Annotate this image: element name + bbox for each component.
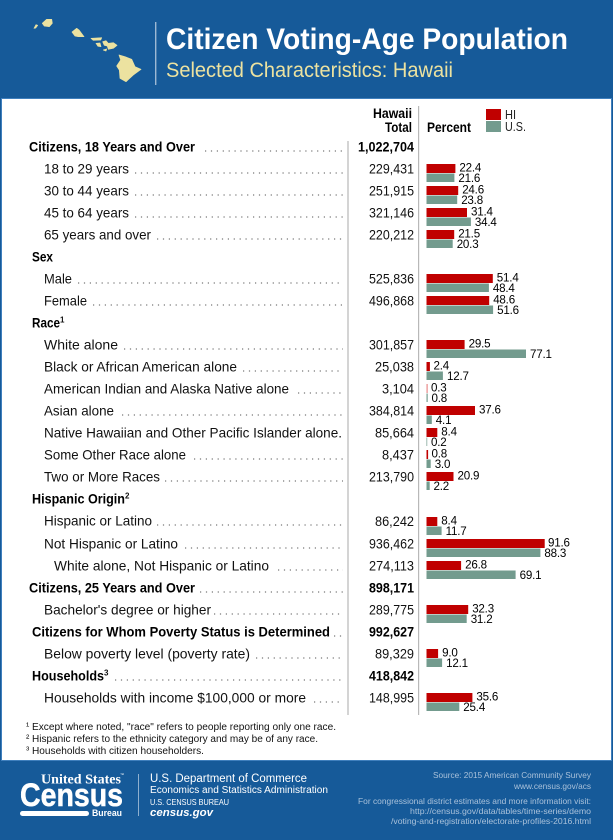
row: Not Hispanic or Latino: Not Hispanic or Latino (44, 536, 178, 552)
row: 18 to 29 years: 22.4 (459, 162, 482, 174)
row: White alone, Not Hispanic or Latino: White alone, Not Hispanic or Latino (54, 558, 269, 574)
row: 65 years and over (44, 228, 480, 251)
row: Not Hispanic or Latino: 936,462 (369, 536, 414, 552)
footer: source and links: www.census.gov/acs (513, 781, 591, 791)
row: Asian alone: 4.1 (436, 414, 451, 427)
row: Bachelor's degree or higher: 289,775 (369, 602, 414, 618)
row: Citizens, 18 Years and Over (29, 140, 414, 154)
row: Hispanic or Latino: 86,242 (375, 514, 414, 529)
row: Black or African American alone: 2.4 (434, 360, 450, 372)
footer: source and links: For congressional district estimates and more information visit: (358, 796, 591, 806)
row: Black or African American alone: 25,038 (375, 360, 414, 374)
column heading: Percent: Percent (427, 120, 471, 135)
row: 30 to 44 years: 251,915 (369, 184, 414, 198)
heading: Race: Race (32, 316, 60, 330)
row: 18 to 29 years: 229,431 (369, 162, 414, 176)
row: Two or More Races: 2.2 (434, 480, 449, 493)
row: Hispanic or Latino: 11.7 (446, 525, 467, 538)
footer logo: United States Census Bureau: Census (20, 777, 123, 813)
row: Below poverty level: 9.0 (442, 646, 458, 660)
row: Hispanic or Latino: Hispanic or Latino (44, 514, 152, 528)
row: American Indian and Alaska Native alone (44, 382, 447, 405)
footer: source and links (358, 770, 592, 826)
row: Two or More Races: 20.9 (458, 470, 479, 482)
row: Some Other Race alone: 8,437 (382, 448, 414, 462)
row: White alone: 77.1 (530, 348, 552, 361)
row: Not Hispanic or Latino: 88.3 (544, 547, 566, 560)
row: Citizens for Whom Poverty Status is Determined: Citizens for Whom Poverty Status is Determined (32, 624, 330, 640)
row: Female: 496,868 (369, 294, 414, 308)
heading: Sex: Sex (32, 250, 53, 264)
header band (34, 19, 568, 85)
heading: Hispanic Origin: 2 (125, 492, 130, 500)
row: Citizens, 25 Years and Over: Citizens, 25 Years and Over (29, 580, 196, 596)
row: Bachelor's degree or higher: Bachelor's degree or higher (44, 602, 211, 618)
legend: U.S. (505, 120, 526, 134)
row: Two or More Races: Two or More Races (44, 470, 160, 484)
row: 45 to 64 years: 321,146 (369, 206, 414, 220)
row: White alone, Not Hispanic or Latino: 69.1 (520, 569, 541, 582)
row: Below poverty level: 12.1 (446, 657, 468, 670)
row: 30 to 44 years: 24.6 (462, 184, 484, 196)
row: 65 years and over: 21.5 (458, 228, 480, 240)
row: Households: 3 (104, 668, 109, 678)
row: Female (44, 294, 519, 317)
row: Citizens, 25 Years and Over (29, 580, 414, 596)
footer: source and links: http://census.gov/data/tables/time-series/demo (410, 806, 591, 816)
row: 45 to 64 years (44, 206, 497, 229)
row: 30 to 44 years: 23.8 (461, 194, 483, 207)
row: 45 to 64 years: 45 to 64 years (44, 206, 129, 220)
row: White alone (44, 338, 552, 361)
footnotes (26, 721, 336, 757)
footer logo: United States Census Bureau: Bureau (92, 808, 122, 818)
row: Not Hispanic or Latino: 91.6 (548, 536, 570, 550)
row: Male: Male (44, 272, 72, 286)
row: Some Other Race alone: 0.8 (432, 448, 447, 460)
row: White alone, Not Hispanic or Latino (54, 558, 541, 582)
row: Female: Female (44, 294, 87, 308)
row: 18 to 29 years: 18 to 29 years (44, 162, 129, 176)
row: Households: Households (32, 668, 104, 684)
footer logo: United States Census Bureau: ™ (120, 772, 124, 777)
footnotes: Except where noted, "race" refers to people reporting only one race. (32, 722, 336, 733)
row: Some Other Race alone: 3.0 (435, 458, 450, 471)
row: Bachelor's degree or higher: 32.3 (472, 602, 494, 616)
row: Native Hawaiian and Other Pacific Islander alone (44, 426, 458, 449)
row: Male (44, 272, 519, 295)
row: Asian alone: Asian alone (44, 404, 114, 418)
row: Native Hawaiian and Other Pacific Islander alone: Native Hawaiian and Other Pacific Islander alone. (44, 426, 342, 440)
white table panel (2, 98, 612, 760)
row: 30 to 44 years: 30 to 44 years (44, 184, 129, 198)
legend: HI (505, 108, 516, 122)
row: American Indian and Alaska Native alone: 3,104 (382, 382, 414, 396)
row: Black or African American alone: 12.7 (447, 370, 469, 383)
row: Asian alone: 384,814 (369, 404, 414, 418)
row: Below poverty level: Below poverty level (poverty rate) (44, 646, 250, 662)
footnotes: Hispanic refers to the ethnicity category and may be of any race. (32, 734, 318, 745)
row: Native Hawaiian and Other Pacific Islander alone: 8.4 (441, 426, 458, 438)
footer: source and links: Source: 2015 American Community Survey (433, 770, 592, 780)
row: Not Hispanic or Latino (44, 536, 570, 560)
row: American Indian and Alaska Native alone: 0.8 (432, 392, 447, 405)
column heading: Hawaii Total (373, 106, 412, 135)
footnotes: ³ (26, 745, 30, 756)
row: Native Hawaiian and Other Pacific Islander alone: 0.2 (431, 436, 447, 449)
legend (486, 108, 526, 134)
row: 18 to 29 years: 21.6 (458, 172, 480, 185)
row: Two or More Races: 213,790 (369, 470, 414, 484)
row: Below poverty level: 89,329 (375, 646, 414, 662)
row: Male: 525,836 (369, 272, 414, 286)
row: White alone, Not Hispanic or Latino: 26.8 (465, 558, 487, 572)
row: White alone: White alone (44, 338, 118, 352)
row: Some Other Race alone: Some Other Race alone (44, 448, 186, 462)
row: 18 to 29 years (44, 162, 482, 185)
row: White alone: 301,857 (369, 338, 414, 352)
footer: department text: Economics and Statistics Administration (150, 785, 328, 796)
footer: department text: U.S. Department of Commerce (150, 773, 307, 785)
row: Male: 48.4 (493, 282, 515, 295)
footer: department text: U.S. CENSUS BUREAU (150, 797, 229, 807)
row: American Indian and Alaska Native alone: 0.3 (431, 382, 447, 394)
subtitle: Selected Characteristics: Hawaii (166, 59, 453, 82)
title: Citizen Voting-Age Population (166, 23, 568, 56)
row: Hispanic or Latino: 8.4 (441, 514, 458, 528)
footer: department text (150, 773, 328, 819)
row: 65 years and over: 20.3 (457, 238, 478, 251)
row: Female: 48.6 (493, 294, 515, 306)
row: Female: 51.6 (497, 304, 519, 317)
row: Households with income $100,000 or more (44, 690, 498, 714)
row: Bachelor's degree or higher: 31.2 (471, 613, 492, 626)
footer: department text: census.gov (150, 807, 214, 819)
row: 45 to 64 years: 34.4 (475, 216, 497, 229)
row: Black or African American alone: Black or African American alone (44, 360, 237, 374)
row: Asian alone: 37.6 (479, 404, 501, 416)
heading: Hispanic Origin: Hispanic Origin (32, 492, 125, 506)
footnotes: ² (26, 733, 30, 744)
row: Citizens, 18 Years and Over: Citizens, 18 Years and Over (29, 140, 196, 154)
row: Bachelor's degree or higher (44, 602, 494, 626)
row: Male: 51.4 (497, 272, 519, 284)
footer logo: United States Census Bureau: United States (41, 772, 121, 786)
row: Households: 418,842 (369, 668, 414, 684)
row: White alone, Not Hispanic or Latino: 274,113 (369, 558, 414, 574)
row: Households with income $100,000 or more: 148,995 (369, 690, 414, 706)
footnotes: Households with citizen householders. (32, 746, 204, 757)
row: Native Hawaiian and Other Pacific Islander alone: 85,664 (375, 426, 414, 440)
row: 30 to 44 years (44, 184, 484, 207)
heading: Race: 1 (60, 316, 65, 324)
row: Households with income $100,000 or more: 25.4 (463, 701, 486, 714)
row: Households with income $100,000 or more: 35.6 (476, 690, 498, 704)
footer: source and links: /voting-and-registration/electorate-profiles-2016.html (391, 816, 591, 826)
row: Hispanic or Latino (44, 514, 467, 538)
row: White alone: 29.5 (469, 338, 490, 350)
row: 65 years and over: 65 years and over (44, 228, 151, 242)
footnotes: ¹ (26, 721, 30, 732)
row: Black or African American alone (44, 360, 469, 383)
row: Households (32, 668, 414, 684)
row: Citizens, 18 Years and Over: 1,022,704 (358, 140, 414, 154)
row: American Indian and Alaska Native alone: American Indian and Alaska Native alone (44, 382, 289, 396)
row: Households with income $100,000 or more: Households with income $100,000 or more (44, 690, 306, 706)
icon: map of Hawaiian islands (34, 19, 141, 82)
row: Asian alone (44, 404, 501, 427)
row: Two or More Races (44, 470, 479, 493)
row: 65 years and over: 220,212 (369, 228, 414, 242)
row: Some Other Race alone (44, 448, 450, 471)
column dividers (347, 106, 419, 715)
row: Citizens for Whom Poverty Status is Determined: 992,627 (369, 624, 414, 640)
row: Below poverty level (44, 646, 468, 670)
column heading: Hawaii Total: Total (385, 120, 412, 135)
column heading: Hawaii Total: Hawaii (373, 106, 412, 121)
row: 45 to 64 years: 31.4 (471, 206, 494, 218)
row: Citizens, 25 Years and Over: 898,171 (369, 580, 414, 596)
